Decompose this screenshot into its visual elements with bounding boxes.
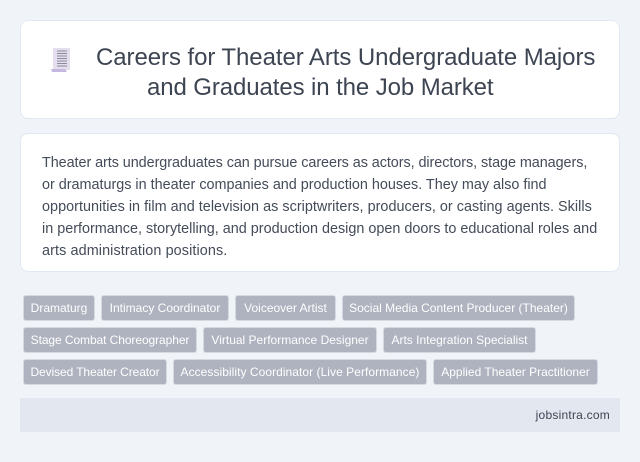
tag: Stage Combat Choreographer (23, 327, 197, 353)
tag: Devised Theater Creator: Devised Theater Creator (30, 365, 160, 379)
tag: Applied Theater Practitioner: Applied Theater Practitioner (441, 365, 590, 379)
tag: Virtual Performance Designer: Virtual Performance Designer (211, 333, 369, 347)
icon: scroll document (51, 48, 70, 72)
tag: Stage Combat Choreographer: Stage Combat Choreographer (31, 333, 189, 347)
title line 1: Careers for Theater Arts Undergraduate Majors (96, 44, 595, 71)
tag: Social Media Content Producer (Theater) (342, 295, 575, 321)
tag: Accessibility Coordinator (Live Performance) (173, 359, 427, 385)
footer text: jobsintra.com (536, 408, 610, 422)
tag: Social Media Content Producer (Theater): Social Media Content Producer (Theater) (349, 301, 568, 315)
tag: Intimacy Coordinator (101, 295, 229, 321)
tag: Accessibility Coordinator (Live Performance): Accessibility Coordinator (Live Performance) (181, 365, 419, 379)
tag: Applied Theater Practitioner (433, 359, 598, 385)
panel: description (20, 133, 620, 272)
title line 2: and Graduates in the Job Market (147, 74, 493, 101)
tag: Voiceover Artist: Voiceover Artist (244, 301, 327, 315)
footer bar (20, 398, 620, 432)
description line 3: opportunities in film and television as scriptwriters, producers, or casting agents. Skills (42, 199, 592, 215)
tag: Arts Integration Specialist (383, 327, 536, 353)
tag: Voiceover Artist (235, 295, 336, 321)
tag: Intimacy Coordinator: Intimacy Coordinator (110, 301, 220, 315)
description line 5: arts administration positions. (42, 243, 227, 259)
description line 4: in performance, storytelling, and production design open doors to educational roles and (42, 221, 597, 237)
tag: Devised Theater Creator (23, 359, 167, 385)
description line 1: Theater arts undergraduates can pursue careers as actors, directors, stage managers, (42, 155, 587, 171)
tag: Virtual Performance Designer (203, 327, 377, 353)
description line 2: or dramaturgs in theater companies and production houses. They may also find (42, 177, 547, 193)
panel: header (20, 20, 620, 119)
tag: Arts Integration Specialist: Arts Integration Specialist (391, 333, 528, 347)
tag: Dramaturg (23, 295, 95, 321)
tag: Dramaturg: Dramaturg (31, 301, 87, 315)
